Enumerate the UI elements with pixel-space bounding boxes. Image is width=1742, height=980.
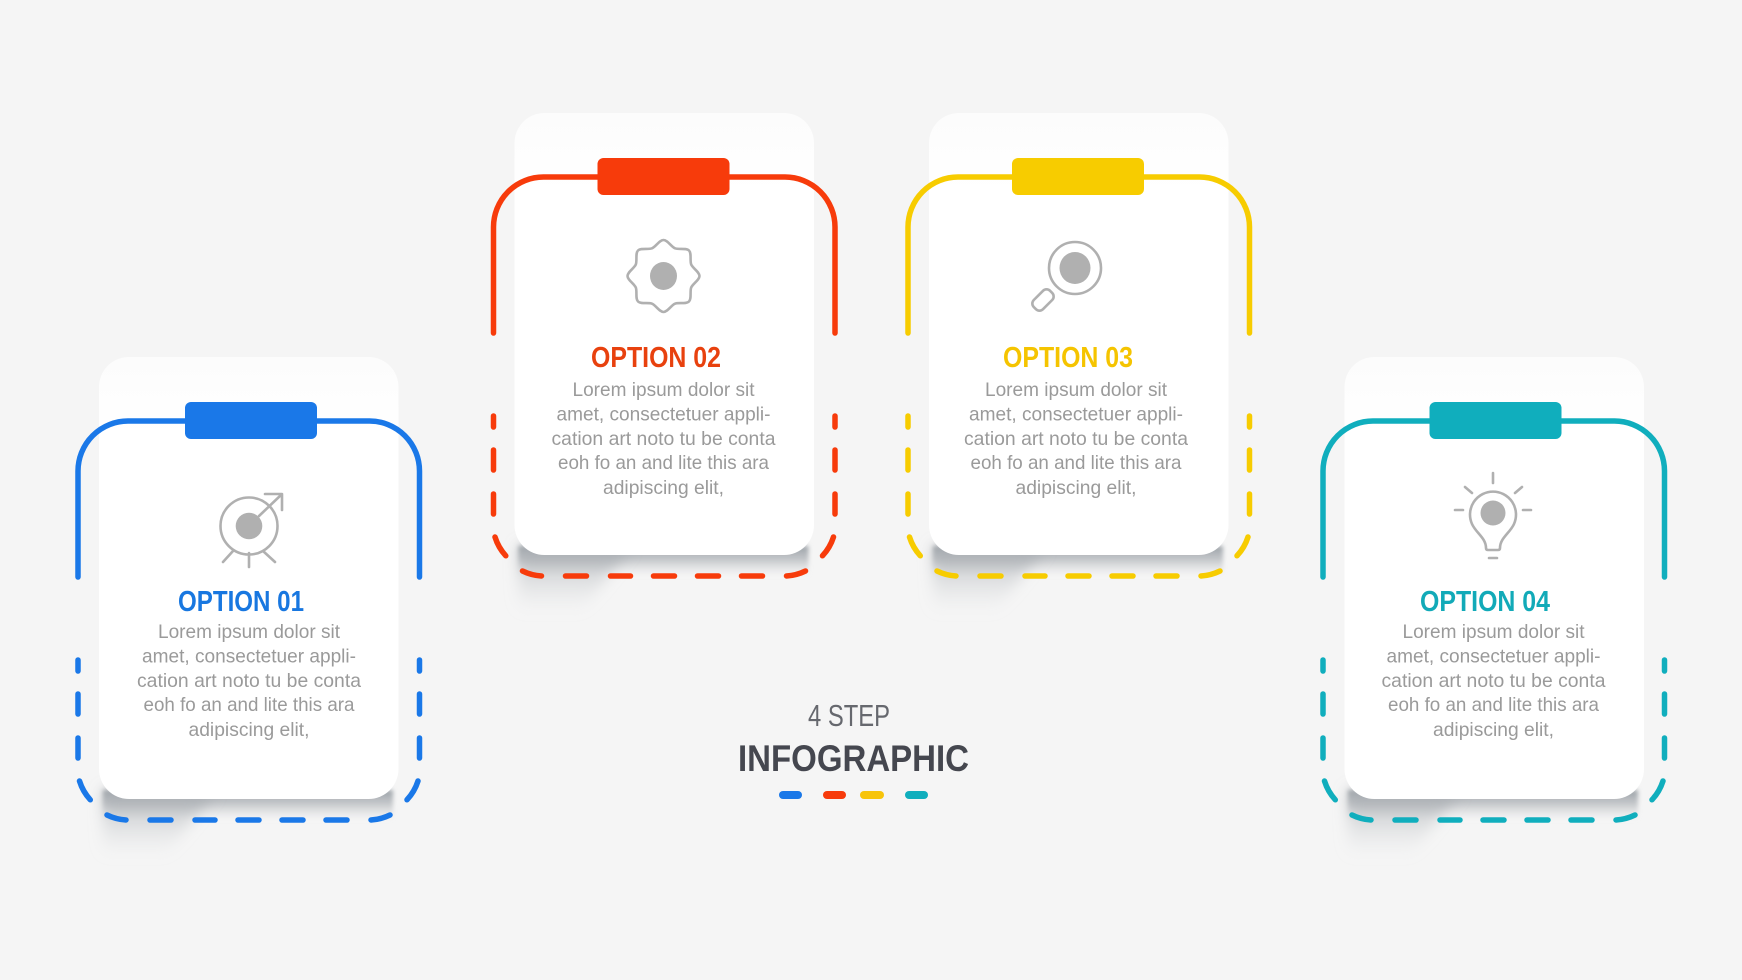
badge <box>185 402 317 439</box>
text block: eoh fo an and lite this ara <box>558 452 769 474</box>
dashed frame <box>494 416 835 576</box>
card shadow <box>933 546 1223 612</box>
heading: OPTION 01 <box>178 586 304 618</box>
text block: Lorem ipsum dolor sit <box>985 379 1168 401</box>
dashed frame <box>78 660 420 820</box>
main title: INFOGRAPHIC <box>738 738 969 779</box>
panel: option 01 <box>78 357 420 856</box>
solid frame <box>78 421 420 577</box>
badge <box>1012 158 1144 195</box>
icon: light bulb <box>1455 473 1531 558</box>
subtitle: 4 STEP <box>808 698 890 733</box>
badge <box>598 158 730 195</box>
text block: adipiscing elit, <box>1433 719 1554 741</box>
dashed frame <box>1323 660 1664 820</box>
text block: adipiscing elit, <box>603 477 724 499</box>
icon: gear <box>628 240 700 312</box>
colour dashes <box>779 791 928 799</box>
panel: option 03 <box>908 113 1250 612</box>
icon: magnifier <box>1030 242 1101 313</box>
text block: cation art noto tu be conta <box>1382 670 1606 692</box>
text block: adipiscing elit, <box>188 719 310 741</box>
text block: amet, consectetuer appli- <box>969 404 1183 426</box>
text block: eoh fo an and lite this ara <box>144 694 355 716</box>
text block: cation art noto tu be conta <box>964 428 1188 450</box>
text block: Lorem ipsum dolor sit <box>158 621 341 643</box>
text block: Lorem ipsum dolor sit <box>1402 621 1585 643</box>
text block <box>137 621 361 741</box>
card <box>99 357 398 799</box>
text block: eoh fo an and lite this ara <box>970 452 1182 474</box>
text block <box>1382 621 1606 741</box>
solid frame <box>494 177 835 333</box>
card shadow <box>103 790 393 856</box>
text block: Lorem ipsum dolor sit <box>572 379 755 401</box>
text block <box>552 379 776 499</box>
text block: adipiscing elit, <box>1016 477 1136 499</box>
text block: amet, consectetuer appli- <box>142 646 356 668</box>
text block: amet, consectetuer appli- <box>556 404 770 426</box>
panel: option 02 <box>494 113 835 612</box>
text block: cation art noto tu be conta <box>137 670 361 692</box>
solid frame <box>1323 421 1664 577</box>
panel: option 04 <box>1323 357 1664 856</box>
card <box>514 113 814 555</box>
card shadow <box>1348 790 1638 856</box>
text block: amet, consectetuer appli- <box>1386 646 1600 668</box>
text block <box>964 379 1188 499</box>
card <box>929 113 1228 555</box>
text block: cation art noto tu be conta <box>552 428 776 450</box>
title <box>738 698 969 799</box>
heading: OPTION 03 <box>1003 342 1133 374</box>
heading: OPTION 04 <box>1420 586 1550 618</box>
dashed frame <box>908 416 1250 576</box>
card <box>1344 357 1644 799</box>
card shadow <box>518 546 808 612</box>
heading: OPTION 02 <box>591 342 721 374</box>
badge <box>1430 402 1562 439</box>
solid frame <box>908 177 1250 333</box>
icon: target with arrow <box>220 494 282 567</box>
text block: eoh fo an and lite this ara <box>1388 694 1599 716</box>
